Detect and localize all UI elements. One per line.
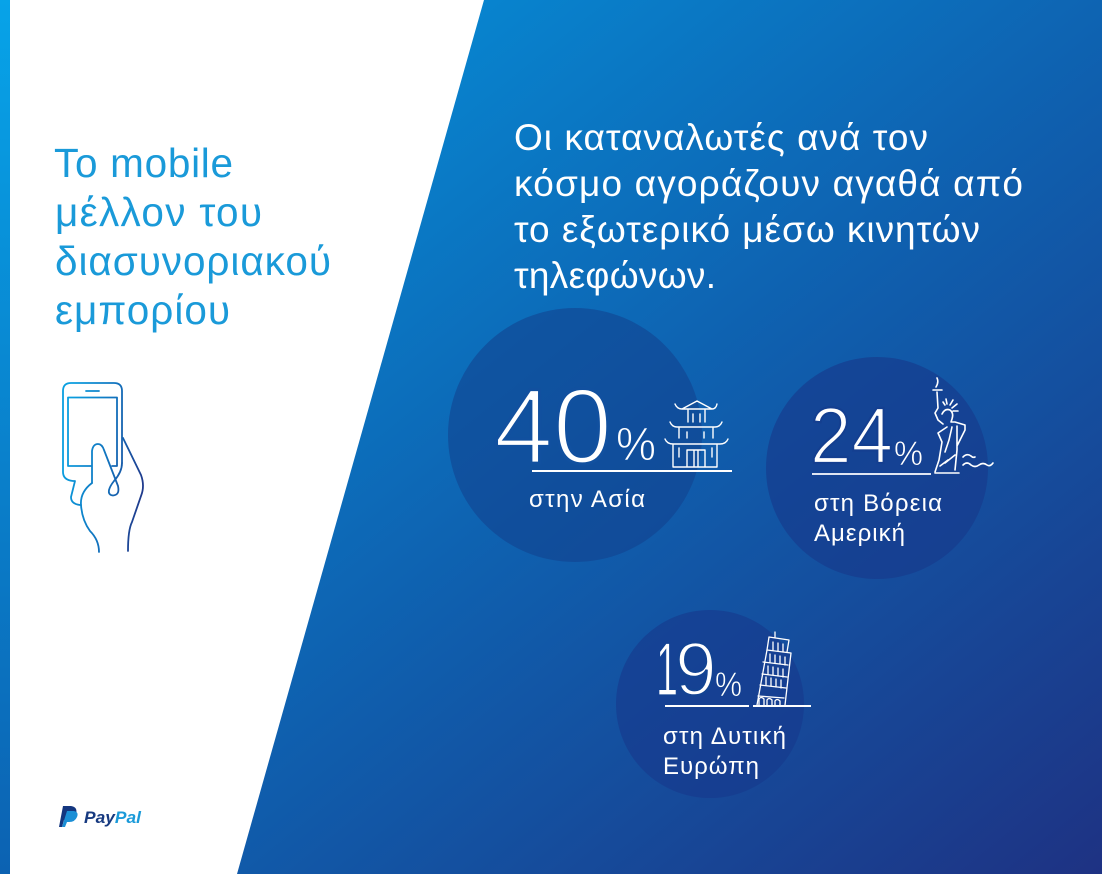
panel: North America statistic bbox=[766, 357, 993, 579]
label: στη Βόρεια bbox=[814, 490, 942, 517]
heading: right panel: κόσμο αγοράζουν αγαθά από bbox=[514, 163, 1023, 204]
number: 24: 24 bbox=[810, 391, 893, 480]
label bbox=[663, 723, 786, 780]
number: 19: 1 bbox=[656, 627, 678, 711]
heading: right panel bbox=[514, 117, 1023, 296]
label: Ευρώπη bbox=[663, 753, 759, 780]
title: μέλλον του bbox=[55, 189, 262, 235]
logo: PayPal bbox=[59, 806, 141, 827]
logo wordmark: PayPal bbox=[84, 809, 141, 827]
icon: hand holding phone bbox=[63, 383, 143, 552]
heading: right panel: Οι καταναλωτές ανά τον bbox=[514, 117, 928, 158]
underline bbox=[812, 473, 931, 475]
title: εμπορίου bbox=[55, 287, 230, 333]
underline bbox=[532, 470, 732, 472]
label: στην Ασία bbox=[529, 486, 645, 513]
underline under tower bbox=[753, 705, 811, 707]
circle: Western Europe bbox=[616, 610, 804, 798]
percent sign: % bbox=[715, 666, 742, 704]
percent sign: % bbox=[616, 417, 656, 470]
heading: right panel: τηλεφώνων. bbox=[514, 255, 716, 296]
circle: Asia bbox=[448, 308, 702, 562]
percent sign: % bbox=[894, 435, 923, 473]
label: στη Δυτική bbox=[663, 723, 786, 750]
panel: Asia statistic bbox=[448, 308, 732, 562]
icon: leaning tower of Pisa bbox=[757, 632, 791, 705]
icon: pagoda bbox=[665, 401, 728, 467]
label bbox=[814, 490, 942, 547]
number: 19 bbox=[656, 627, 717, 711]
background: blue gradient panel bbox=[237, 0, 1102, 874]
label: Αμερική bbox=[814, 520, 905, 547]
number: 19: 9 bbox=[675, 627, 717, 711]
title: διασυνοριακού bbox=[55, 238, 331, 284]
panel: Western Europe statistic bbox=[616, 610, 811, 798]
underline bbox=[665, 705, 749, 707]
title bbox=[54, 140, 331, 333]
heading: right panel: το εξωτερικό μέσω κινητών bbox=[514, 209, 980, 250]
icon: PayPal mark bbox=[59, 806, 78, 827]
left accent strip bbox=[0, 0, 10, 874]
icon: statue of liberty bbox=[933, 378, 993, 473]
number: 40: 40 bbox=[494, 366, 612, 486]
title: Το mobile bbox=[54, 140, 233, 186]
circle: North America bbox=[766, 357, 988, 579]
